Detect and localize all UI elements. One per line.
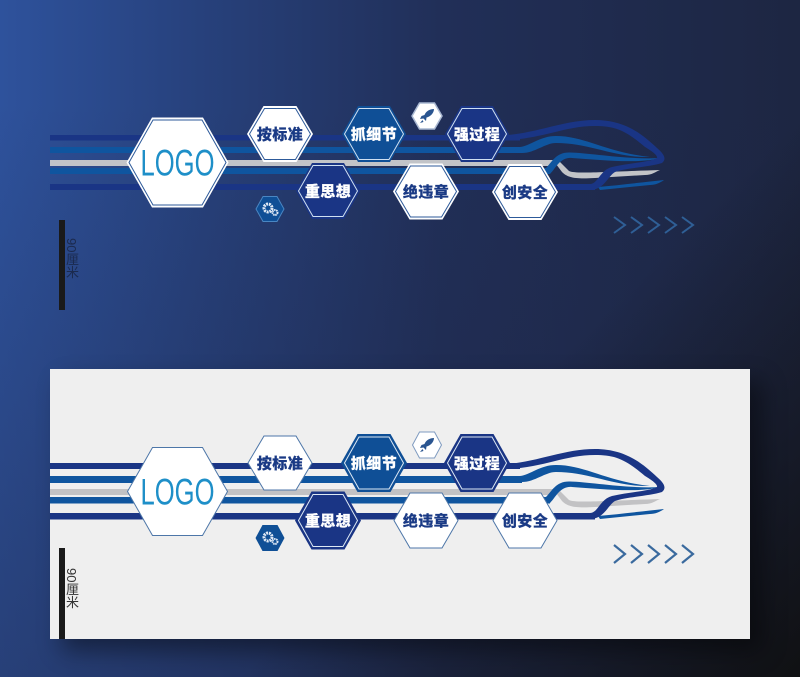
height label: dark version: 90厘米 bbox=[64, 238, 79, 278]
height ruler: light version bbox=[59, 548, 65, 639]
hexagon: 强过程: 强过程 bbox=[454, 126, 500, 144]
hexagon: 重思想: 重思想 bbox=[305, 512, 351, 530]
icon: gears bbox=[256, 196, 284, 222]
hexagon: 按标准: 按标准 bbox=[257, 126, 303, 144]
hexagon: 强过程 bbox=[444, 434, 510, 492]
icon: gears bbox=[256, 525, 284, 551]
height ruler: dark version bbox=[59, 220, 65, 310]
hexagon: 创安全: 创安全 bbox=[502, 184, 548, 202]
horizontal track lines bbox=[50, 135, 595, 190]
LOGO hexagon: LOGO bbox=[140, 472, 214, 512]
LOGO hexagon bbox=[126, 118, 228, 208]
hexagon: 按标准: 按标准 bbox=[257, 454, 303, 472]
icon: rocket bbox=[412, 103, 442, 129]
hexagon: 按标准 bbox=[248, 436, 312, 490]
hexagon: 强过程 bbox=[445, 106, 509, 162]
icon: rocket bbox=[412, 432, 442, 458]
LOGO hexagon bbox=[128, 448, 228, 536]
height label: light version: 90厘米 bbox=[64, 568, 79, 608]
panel: light wall mockup bbox=[50, 369, 750, 639]
hexagon: 强过程: 强过程 bbox=[454, 454, 500, 472]
hexagon: 抓细节 bbox=[341, 434, 407, 492]
hexagon: 抓细节: 抓细节 bbox=[351, 454, 397, 472]
hexagon: 按标准 bbox=[247, 106, 313, 162]
hexagon: 创安全 bbox=[492, 164, 558, 220]
design: dark version bbox=[50, 103, 693, 233]
arrows bbox=[614, 545, 693, 563]
train silhouette bbox=[508, 120, 664, 190]
LOGO hexagon: LOGO bbox=[140, 142, 214, 184]
design: light version bbox=[50, 432, 693, 563]
hexagon: 创安全 bbox=[493, 493, 557, 548]
hexagon: 绝违章: 绝违章 bbox=[403, 183, 449, 201]
hexagon: 绝违章: 绝违章 bbox=[403, 512, 449, 530]
hexagon: 重思想: 重思想 bbox=[305, 182, 351, 200]
train silhouette bbox=[508, 449, 664, 519]
hexagon: 绝违章 bbox=[394, 493, 458, 548]
hexagon: 抓细节 bbox=[342, 106, 406, 162]
hexagon: 创安全: 创安全 bbox=[502, 512, 548, 530]
arrows bbox=[614, 217, 693, 233]
horizontal track lines bbox=[50, 463, 595, 520]
hexagon: 重思想 bbox=[295, 492, 361, 550]
hexagon: 重思想 bbox=[296, 163, 360, 219]
hexagon: 抓细节: 抓细节 bbox=[351, 126, 397, 144]
hexagon: 绝违章 bbox=[393, 164, 459, 220]
